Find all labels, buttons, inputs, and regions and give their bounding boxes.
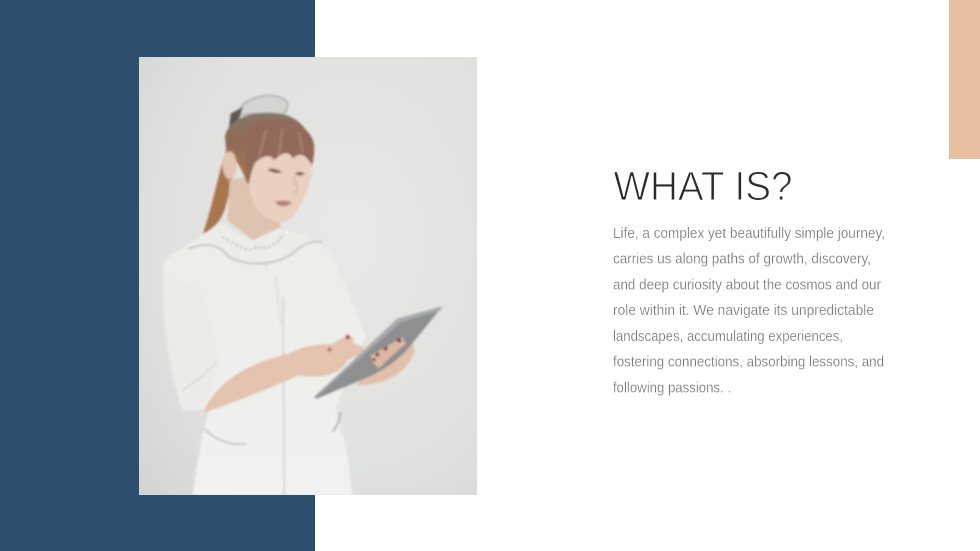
panel: navy background block xyxy=(0,0,315,551)
ear xyxy=(223,151,237,179)
panel: peach corner accent xyxy=(949,0,980,159)
forearm skin xyxy=(204,344,360,412)
goggles xyxy=(241,96,288,116)
title: WHAT IS? xyxy=(614,163,792,209)
text block: body paragraph: following passions. . xyxy=(613,380,731,396)
collar shadow and yoke line xyxy=(189,242,322,263)
bangs xyxy=(246,119,314,185)
fingers front of tablet xyxy=(324,337,364,367)
face xyxy=(248,154,313,222)
coat body xyxy=(163,222,366,495)
pocket lines xyxy=(204,429,246,444)
text block: body paragraph: landscapes, accumulating experiences, xyxy=(613,328,843,345)
ponytail xyxy=(203,150,234,234)
text block: body paragraph: carries us along paths of growth, discovery, xyxy=(613,251,871,268)
nails xyxy=(345,335,350,339)
tablet xyxy=(314,306,442,399)
neck xyxy=(227,177,281,241)
coat sleeve xyxy=(163,274,221,410)
text block: body paragraph xyxy=(613,225,885,396)
eyes, nose and lips xyxy=(267,169,282,173)
hair xyxy=(225,113,313,184)
photo: woman in white coat using a tablet xyxy=(139,57,477,495)
placket xyxy=(283,297,284,495)
back hand xyxy=(356,337,414,385)
text block: body paragraph: role within it. We navigate its unpredictable xyxy=(613,302,874,319)
